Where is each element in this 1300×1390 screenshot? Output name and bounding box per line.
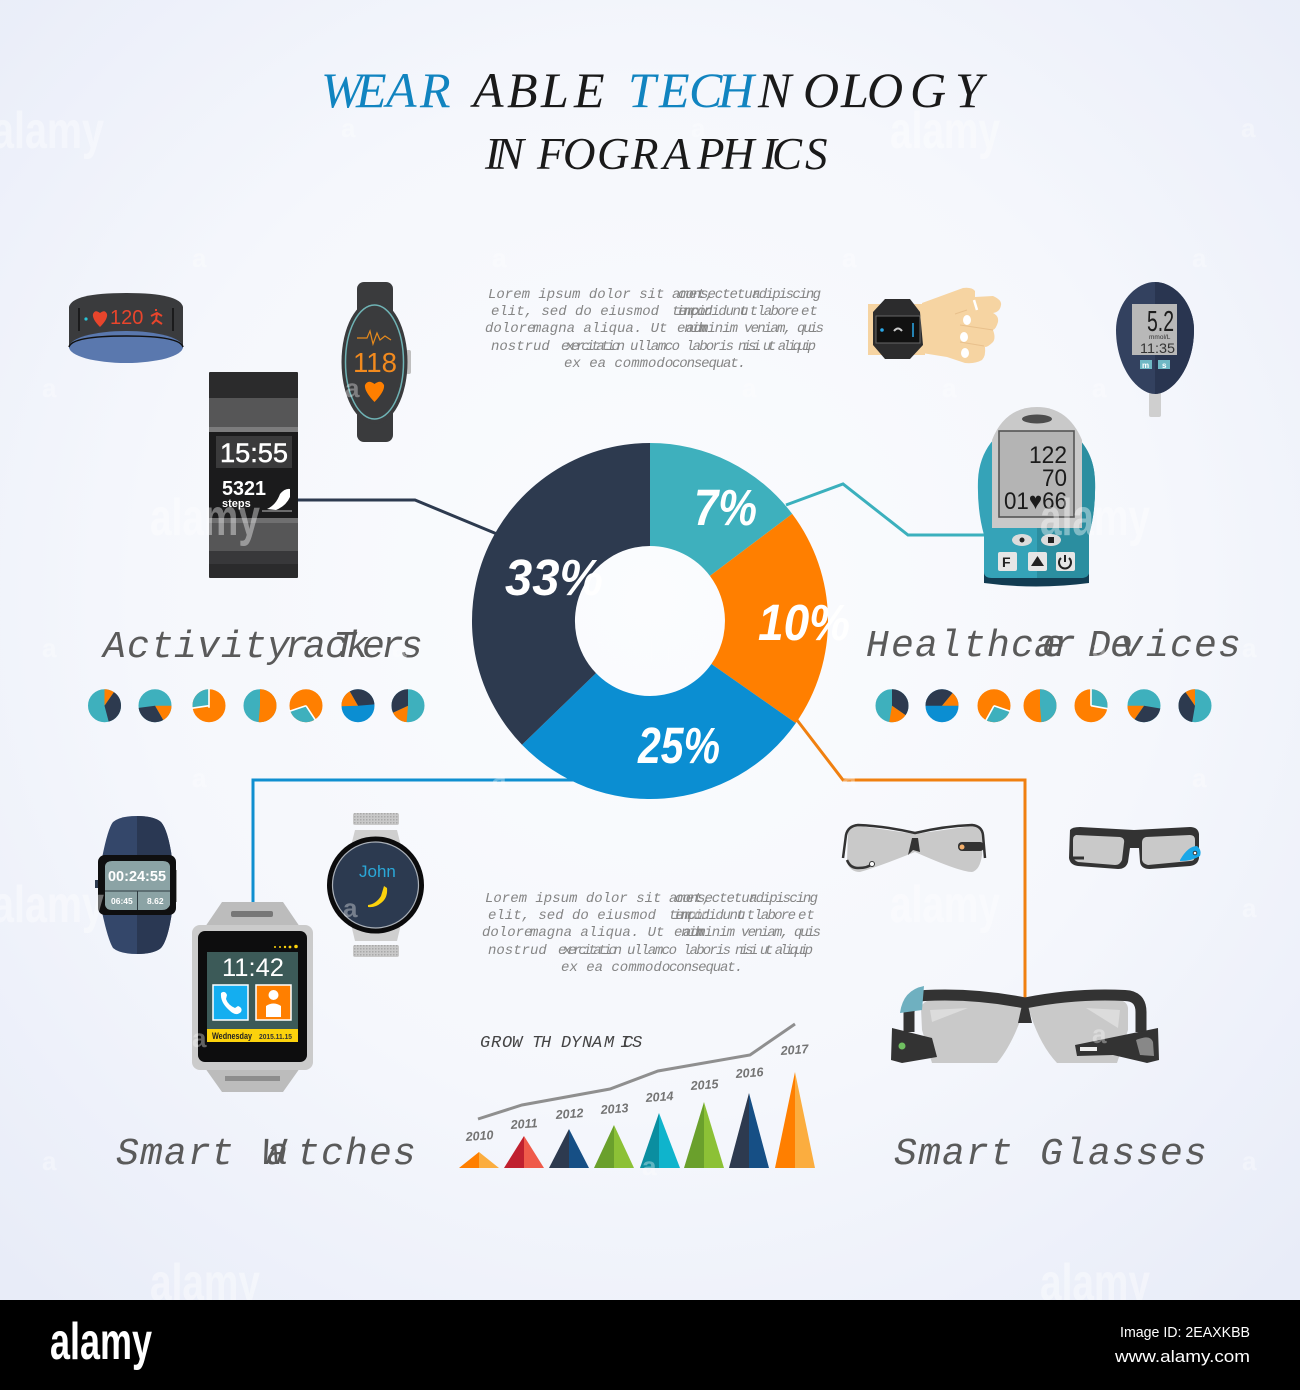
title bbox=[321, 62, 988, 179]
text block: lower lorem ipsum: minim bbox=[697, 925, 736, 941]
icon: sport watch 00:24:55: 8.62 bbox=[147, 896, 164, 906]
donut chart: 25% bbox=[637, 717, 720, 774]
footer image id: Image ID: 2EAXKBB bbox=[1120, 1324, 1250, 1341]
footer logo: alamy bbox=[50, 1313, 152, 1371]
connector: activity trackers bbox=[298, 500, 497, 534]
pie 5 bbox=[1083, 689, 1108, 714]
icon: square smart watch 11:42: 11:42 bbox=[222, 954, 284, 982]
text block: upper lorem ipsum: ex ea commodo bbox=[564, 356, 673, 372]
title: TECH bbox=[628, 62, 757, 118]
year labels: 2011 bbox=[509, 1116, 538, 1132]
text block: lower lorem ipsum: nostrud bbox=[488, 943, 547, 959]
text block: upper lorem ipsum: ad bbox=[686, 321, 703, 337]
text block: upper lorem ipsum: veniam, bbox=[744, 321, 792, 337]
pies: healthcare devices row bbox=[884, 689, 1203, 720]
text block: lower lorem ipsum: Lorem ipsum dolor sit bbox=[485, 891, 661, 907]
year labels: 2016 bbox=[734, 1065, 765, 1081]
text block: lower lorem ipsum: dolore bbox=[482, 925, 532, 941]
watermarks: a bbox=[1092, 1019, 1107, 1049]
text block: lower lorem ipsum: adipiscing bbox=[749, 891, 818, 907]
pie 1 bbox=[884, 697, 900, 714]
watermarks: alamy bbox=[1040, 489, 1150, 547]
text block: upper lorem ipsum: ut bbox=[740, 304, 758, 320]
watermarks: a bbox=[1092, 633, 1107, 663]
pie 7 bbox=[400, 697, 416, 714]
pie 1 bbox=[96, 697, 113, 714]
watermarks: a bbox=[42, 1146, 57, 1176]
pie 3 bbox=[192, 689, 217, 714]
heading: Healthcare Devices: Healthcare Devices bbox=[866, 625, 1241, 668]
text block: lower lorem ipsum bbox=[482, 891, 821, 976]
watermarks: a bbox=[1092, 373, 1107, 403]
year labels: 2012 bbox=[554, 1106, 584, 1122]
pie 5 bbox=[290, 697, 316, 720]
text block: upper lorem ipsum: consequat. bbox=[672, 356, 746, 372]
year labels: 2014 bbox=[644, 1089, 674, 1105]
icon: glucose meter 5.2: 11:35 bbox=[1140, 340, 1175, 356]
text block: lower lorem ipsum: et bbox=[798, 908, 815, 924]
pie 6 bbox=[1136, 697, 1152, 714]
text block: upper lorem ipsum: laboris bbox=[686, 339, 734, 355]
icon: square smart watch 11:42 bbox=[192, 902, 313, 1092]
year labels: 2017 bbox=[779, 1042, 810, 1058]
icon: step tracker 15:55: 15:55 bbox=[220, 438, 288, 468]
icon: blood pressure monitor: 70 bbox=[1042, 465, 1067, 492]
text block: upper lorem ipsum: exercitation bbox=[561, 339, 625, 355]
donut chart: 10% bbox=[758, 594, 850, 651]
title: INFOGRAPHICS bbox=[484, 129, 828, 179]
text block: lower lorem ipsum: ad bbox=[683, 925, 700, 941]
footer url: www.alamy.com bbox=[1114, 1347, 1250, 1366]
icon: sport watch 00:24:55 bbox=[95, 816, 177, 954]
text block: lower lorem ipsum: amet, bbox=[669, 891, 711, 907]
text block: lower lorem ipsum: ullamco bbox=[627, 943, 677, 959]
text block: upper lorem ipsum: dolore bbox=[485, 321, 535, 337]
pie 2 bbox=[934, 697, 950, 714]
watermarks: a bbox=[341, 113, 356, 143]
watermarks: alamy bbox=[1040, 1254, 1150, 1312]
connector: smart watches bbox=[253, 780, 575, 905]
watermarks: a bbox=[42, 633, 57, 663]
watermarks: alamy bbox=[890, 876, 1000, 934]
text block: upper lorem ipsum: labore bbox=[757, 304, 799, 320]
watermarks: a bbox=[1242, 1146, 1257, 1176]
icon: glucose meter 5.2: 5.2 bbox=[1147, 306, 1174, 338]
watermarks: a bbox=[692, 893, 707, 923]
pies: activity trackers row bbox=[96, 689, 416, 720]
text block: lower lorem ipsum: incididunt bbox=[673, 908, 745, 924]
text block: upper lorem ipsum bbox=[485, 287, 824, 372]
watermarks: alamy bbox=[595, 616, 705, 674]
text block: upper lorem ipsum: adipiscing bbox=[752, 287, 821, 303]
heading: Smart Watches: Smart Watches bbox=[116, 1133, 416, 1176]
watermarks: alamy bbox=[150, 489, 260, 547]
watermarks: alamy bbox=[150, 1254, 260, 1312]
donut chart bbox=[472, 443, 850, 799]
text block: upper lorem ipsum: quis bbox=[797, 321, 824, 337]
icon: sport watch 00:24:55: 00:24:55 bbox=[108, 869, 166, 885]
icon: fitness band 120: 120 bbox=[110, 307, 143, 329]
watermarks: a bbox=[392, 633, 407, 663]
text block: upper lorem ipsum: minim bbox=[700, 321, 739, 337]
pie 4 bbox=[1032, 697, 1048, 714]
watermarks: a bbox=[642, 1151, 657, 1181]
text block: lower lorem ipsum: consectetur bbox=[675, 891, 757, 907]
icon: step tracker 15:55: 5321 bbox=[222, 478, 266, 500]
icon: blood pressure monitor: 01♥66 bbox=[1004, 488, 1067, 515]
text block: lower lorem ipsum: exercitation bbox=[558, 943, 622, 959]
pie 4 bbox=[252, 697, 268, 714]
icon: step tracker 15:55 bbox=[209, 372, 298, 578]
year labels: 2013 bbox=[599, 1101, 629, 1117]
text block: upper lorem ipsum: Lorem ipsum dolor sit bbox=[488, 287, 664, 303]
chart: growth dynamics bbox=[459, 1024, 815, 1168]
text block: upper lorem ipsum: elit, sed do eiusmod bbox=[491, 304, 660, 320]
watermarks: a bbox=[1242, 633, 1257, 663]
watermarks: a bbox=[492, 243, 507, 273]
icon: hand with wrist band bbox=[868, 288, 1001, 363]
text block: lower lorem ipsum: quis bbox=[794, 925, 821, 941]
pie 7 bbox=[1187, 697, 1203, 714]
text block: upper lorem ipsum: nisi ut aliquip bbox=[738, 339, 816, 355]
icon: large smart glasses bbox=[891, 986, 1159, 1063]
text block: lower lorem ipsum: ex ea commodo bbox=[561, 960, 670, 976]
icon: sport watch 00:24:55: 06:45 bbox=[111, 896, 133, 906]
icon: blood pressure monitor: F bbox=[1002, 554, 1011, 570]
year labels: 2010 bbox=[464, 1128, 494, 1144]
watermarks: a bbox=[942, 373, 957, 403]
watermarks: a bbox=[345, 373, 360, 403]
footer bar bbox=[0, 1300, 1300, 1390]
title: ABLE bbox=[470, 62, 605, 118]
icon: glucose meter 5.2: s bbox=[1162, 361, 1167, 370]
text block: lower lorem ipsum: consequat. bbox=[669, 960, 743, 976]
text block: upper lorem ipsum: consectetur bbox=[678, 287, 760, 303]
watermarks: a bbox=[1192, 243, 1207, 273]
pie 6 bbox=[350, 697, 366, 714]
year labels bbox=[464, 1042, 810, 1144]
text block: lower lorem ipsum: laboris bbox=[683, 943, 731, 959]
connector: healthcare devices bbox=[786, 484, 985, 535]
watermarks: a bbox=[691, 113, 706, 143]
donut chart: 7% bbox=[694, 479, 757, 536]
heading: Activity Trackers: Activity Trackers bbox=[101, 626, 423, 669]
text block: upper lorem ipsum: nostrud bbox=[491, 339, 550, 355]
text block: upper lorem ipsum: et bbox=[801, 304, 818, 320]
icon: round smart watch John: John bbox=[359, 862, 396, 881]
watermarks: a bbox=[1192, 763, 1207, 793]
text block: lower lorem ipsum: nisi ut aliquip bbox=[735, 943, 813, 959]
text block: lower lorem ipsum: elit, sed do eiusmod bbox=[488, 908, 657, 924]
watermarks: a bbox=[192, 1023, 207, 1053]
watermarks: a bbox=[192, 243, 207, 273]
text block: upper lorem ipsum: magna aliqua. Ut bbox=[533, 321, 667, 337]
pie 2 bbox=[147, 697, 163, 714]
icon: square smart watch 11:42: Wednesday bbox=[212, 1031, 252, 1041]
watermarks: a bbox=[1241, 113, 1256, 143]
year labels: 2015 bbox=[689, 1077, 720, 1093]
watermarks: a bbox=[742, 373, 757, 403]
text block: upper lorem ipsum: ullamco bbox=[630, 339, 680, 355]
text block: lower lorem ipsum: ut bbox=[737, 908, 755, 924]
title: WEAR bbox=[321, 62, 451, 118]
text block: lower lorem ipsum: enim bbox=[674, 925, 705, 941]
icon: fitness band 120 bbox=[69, 293, 183, 363]
text block: lower lorem ipsum: labore bbox=[754, 908, 796, 924]
watermarks: a bbox=[1242, 893, 1257, 923]
text block: upper lorem ipsum: tempor bbox=[672, 304, 712, 320]
heading: Smart Glasses: Smart Glasses bbox=[894, 1133, 1207, 1176]
watermarks: a bbox=[42, 373, 57, 403]
watermarks: a bbox=[842, 243, 857, 273]
chart title: GROWTH DYNAMICS bbox=[480, 1034, 642, 1053]
icon: glucose meter 5.2 bbox=[1116, 282, 1194, 417]
icon: glasses top-right bbox=[1069, 827, 1201, 869]
icon: heart-rate watch 118: 118 bbox=[353, 347, 397, 378]
watermarks: alamy bbox=[890, 102, 1000, 160]
icon: round smart watch John bbox=[327, 813, 424, 957]
icon: heart-rate watch 118 bbox=[342, 282, 411, 442]
watermarks: a bbox=[343, 893, 358, 923]
text block: lower lorem ipsum: tempor bbox=[669, 908, 709, 924]
text block: lower lorem ipsum: veniam, bbox=[741, 925, 789, 941]
icon: square smart watch 11:42: 2015.11.15 bbox=[259, 1034, 292, 1041]
watermarks: a bbox=[192, 763, 207, 793]
text block: upper lorem ipsum: amet, bbox=[672, 287, 714, 303]
text block: upper lorem ipsum: incididunt bbox=[676, 304, 748, 320]
icon: blood pressure monitor: 122 bbox=[1029, 442, 1067, 469]
watermarks: a bbox=[492, 763, 507, 793]
watermarks: a bbox=[842, 763, 857, 793]
text block: lower lorem ipsum: magna aliqua. Ut bbox=[530, 925, 664, 941]
icon: glucose meter 5.2: mmol/L bbox=[1149, 334, 1171, 341]
year bars bbox=[459, 1072, 815, 1168]
icon: glucose meter 5.2: m bbox=[1142, 361, 1149, 370]
title: NOLOGY bbox=[757, 62, 988, 118]
text block: upper lorem ipsum: enim bbox=[677, 321, 708, 337]
donut chart: 33% bbox=[505, 549, 603, 606]
pie 3 bbox=[986, 697, 1010, 720]
icon: glasses top-left bbox=[843, 825, 985, 872]
icon: step tracker 15:55: steps bbox=[222, 498, 251, 510]
trend line bbox=[478, 1024, 795, 1119]
icon: blood pressure monitor bbox=[978, 407, 1095, 586]
connector: smart glasses bbox=[797, 720, 1025, 1000]
